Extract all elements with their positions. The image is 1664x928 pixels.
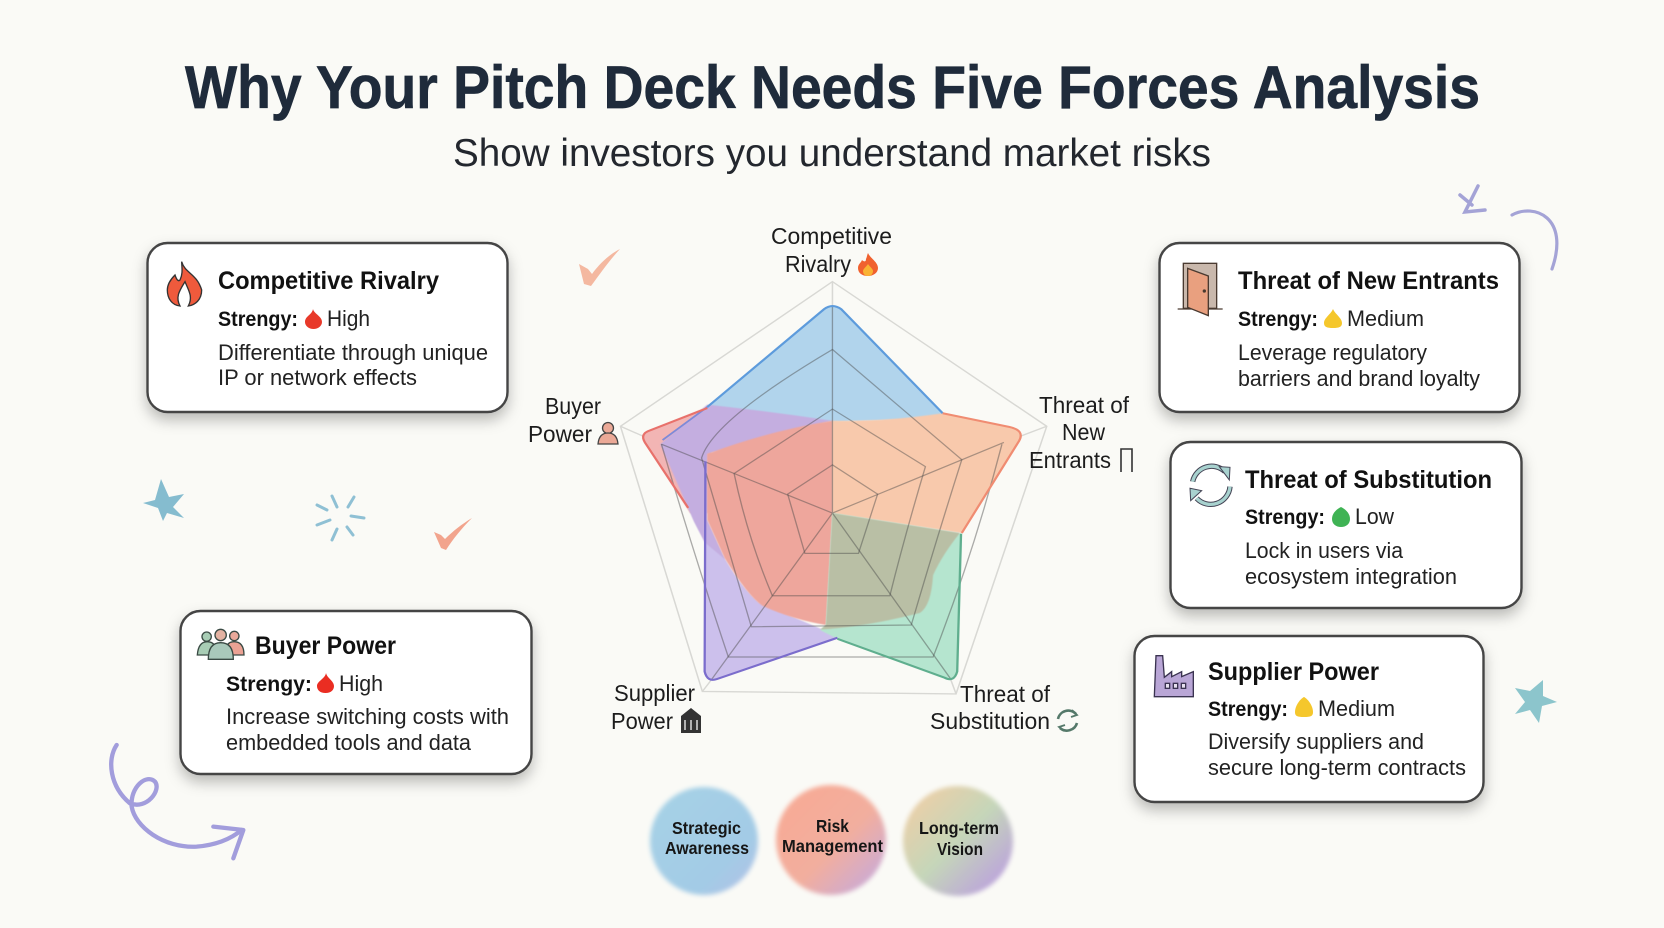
card description (1238, 340, 1480, 391)
card heading: Threat of Substitution (1245, 466, 1492, 494)
strength rating: High (327, 306, 370, 331)
icon: door (1178, 263, 1223, 316)
decoration: sparkle (317, 496, 364, 540)
strength rating (218, 306, 370, 331)
bubble: strategic awareness: Awareness (665, 838, 749, 858)
axis label: threat of new entrants: Entrants (1029, 447, 1111, 473)
series outline: orange (943, 413, 1021, 533)
title: Why Your Pitch Deck Needs Five Forces Analysis (185, 54, 1480, 121)
card heading: Buyer Power (255, 632, 396, 660)
series fill: red tip (643, 406, 713, 513)
card: threat of new entrants (1160, 243, 1520, 412)
icon: flame (167, 262, 202, 306)
card description: Diversify suppliers and (1208, 729, 1424, 754)
card description: Lock in users via (1245, 538, 1404, 563)
card heading: Threat of New Entrants (1238, 267, 1499, 295)
axis label: threat of substitution (930, 681, 1077, 734)
series outline: blue (707, 306, 943, 413)
strength rating: Strengy: (1208, 697, 1288, 721)
card: supplier power (1134, 636, 1484, 802)
series outline: green (837, 534, 961, 679)
strength rating: Medium (1318, 696, 1395, 721)
bubble: long-term vision: Long-term (919, 818, 999, 838)
axis label: threat of substitution: Substitution (930, 708, 1050, 734)
series fill: blue (707, 306, 943, 422)
card description: IP or network effects (218, 365, 417, 390)
axis label: threat of new entrants: Threat of (1039, 392, 1129, 418)
axis label: supplier power: Supplier (614, 680, 695, 706)
card description (226, 704, 509, 755)
card: buyer power (180, 611, 532, 774)
axis label: competitive rivalry: Rivalry (785, 251, 851, 277)
strength rating: Strengy: (1238, 307, 1318, 331)
icon: placeholder door (1121, 449, 1132, 472)
strength rating: Strengy: (1245, 505, 1325, 529)
icon: building (681, 708, 701, 733)
decoration: check mark top (579, 249, 620, 286)
card: threat of substitution (1170, 442, 1522, 608)
axis label: threat of new entrants: New (1062, 419, 1106, 445)
series fill: purple lower (705, 537, 839, 680)
bubble: strategic awareness: Strategic (672, 818, 741, 838)
card description (1245, 538, 1457, 589)
series fill: purple upper (660, 405, 832, 560)
bubble: long-term vision: Vision (937, 839, 983, 859)
chart outer grid (620, 282, 1047, 694)
bubble: strategic awareness (650, 787, 758, 895)
icon: small cycle (1058, 710, 1077, 731)
series outline: blue-purple link (663, 407, 707, 440)
card description: ecosystem integration (1245, 564, 1457, 589)
series fill: peach (832, 413, 1021, 533)
axis label: competitive rivalry (771, 223, 892, 277)
axis label: buyer power: Buyer (545, 393, 601, 419)
radar rings and spokes (661, 306, 1004, 680)
strength rating: Low (1355, 504, 1394, 529)
card description (218, 340, 488, 390)
strength rating: Medium (1347, 306, 1424, 331)
bubble: risk management: Risk (816, 816, 849, 836)
series fill: overlap (820, 513, 960, 629)
icon: person (598, 422, 618, 444)
bubble: risk management (776, 785, 886, 895)
strength rating (226, 671, 383, 696)
bubble: risk management: Management (782, 836, 883, 856)
axis label: supplier power (611, 680, 701, 734)
card description: barriers and brand loyalty (1238, 366, 1480, 391)
card: competitive rivalry (148, 243, 508, 412)
strength rating: High (339, 671, 383, 696)
card description: Leverage regulatory (1238, 340, 1427, 365)
card description: embedded tools and data (226, 730, 472, 755)
decoration: star right (1515, 680, 1557, 723)
bubble: long-term vision (903, 786, 1013, 896)
card description: Increase switching costs with (226, 704, 509, 729)
icon: factory (1154, 656, 1193, 697)
decoration: star left (143, 479, 184, 521)
decoration: curly arrow (111, 745, 243, 858)
card heading: Competitive Rivalry (218, 267, 439, 295)
subtitle: Show investors you understand market risks (453, 132, 1211, 175)
strength rating: Strengy: (218, 307, 298, 331)
decoration: scribble top right (1460, 186, 1557, 269)
series outline: purple (705, 461, 837, 680)
axis label: buyer power: Power (528, 421, 592, 447)
card description (1208, 729, 1466, 780)
strength rating: Strengy: (226, 672, 312, 696)
card description: Differentiate through unique (218, 340, 488, 365)
series outline: red (643, 408, 707, 508)
axis label: threat of substitution: Threat of (960, 681, 1050, 707)
axis label: buyer power (528, 393, 618, 447)
decoration: check mark lower (434, 518, 472, 550)
axis label: competitive rivalry: Competitive (771, 223, 892, 249)
radar chart (620, 282, 1047, 694)
series fill: green (820, 513, 962, 680)
strength rating (1238, 306, 1424, 331)
card heading: Supplier Power (1208, 658, 1379, 686)
strength rating (1208, 696, 1395, 721)
axis label: supplier power: Power (611, 708, 673, 734)
icon: small flame (858, 253, 878, 276)
icon: people (197, 629, 244, 659)
strength rating (1245, 504, 1394, 529)
series fill: coral (707, 421, 832, 625)
axis label: threat of new entrants (1029, 392, 1132, 473)
icon: cycle arrows (1190, 466, 1230, 504)
card description: secure long-term contracts (1208, 755, 1466, 780)
